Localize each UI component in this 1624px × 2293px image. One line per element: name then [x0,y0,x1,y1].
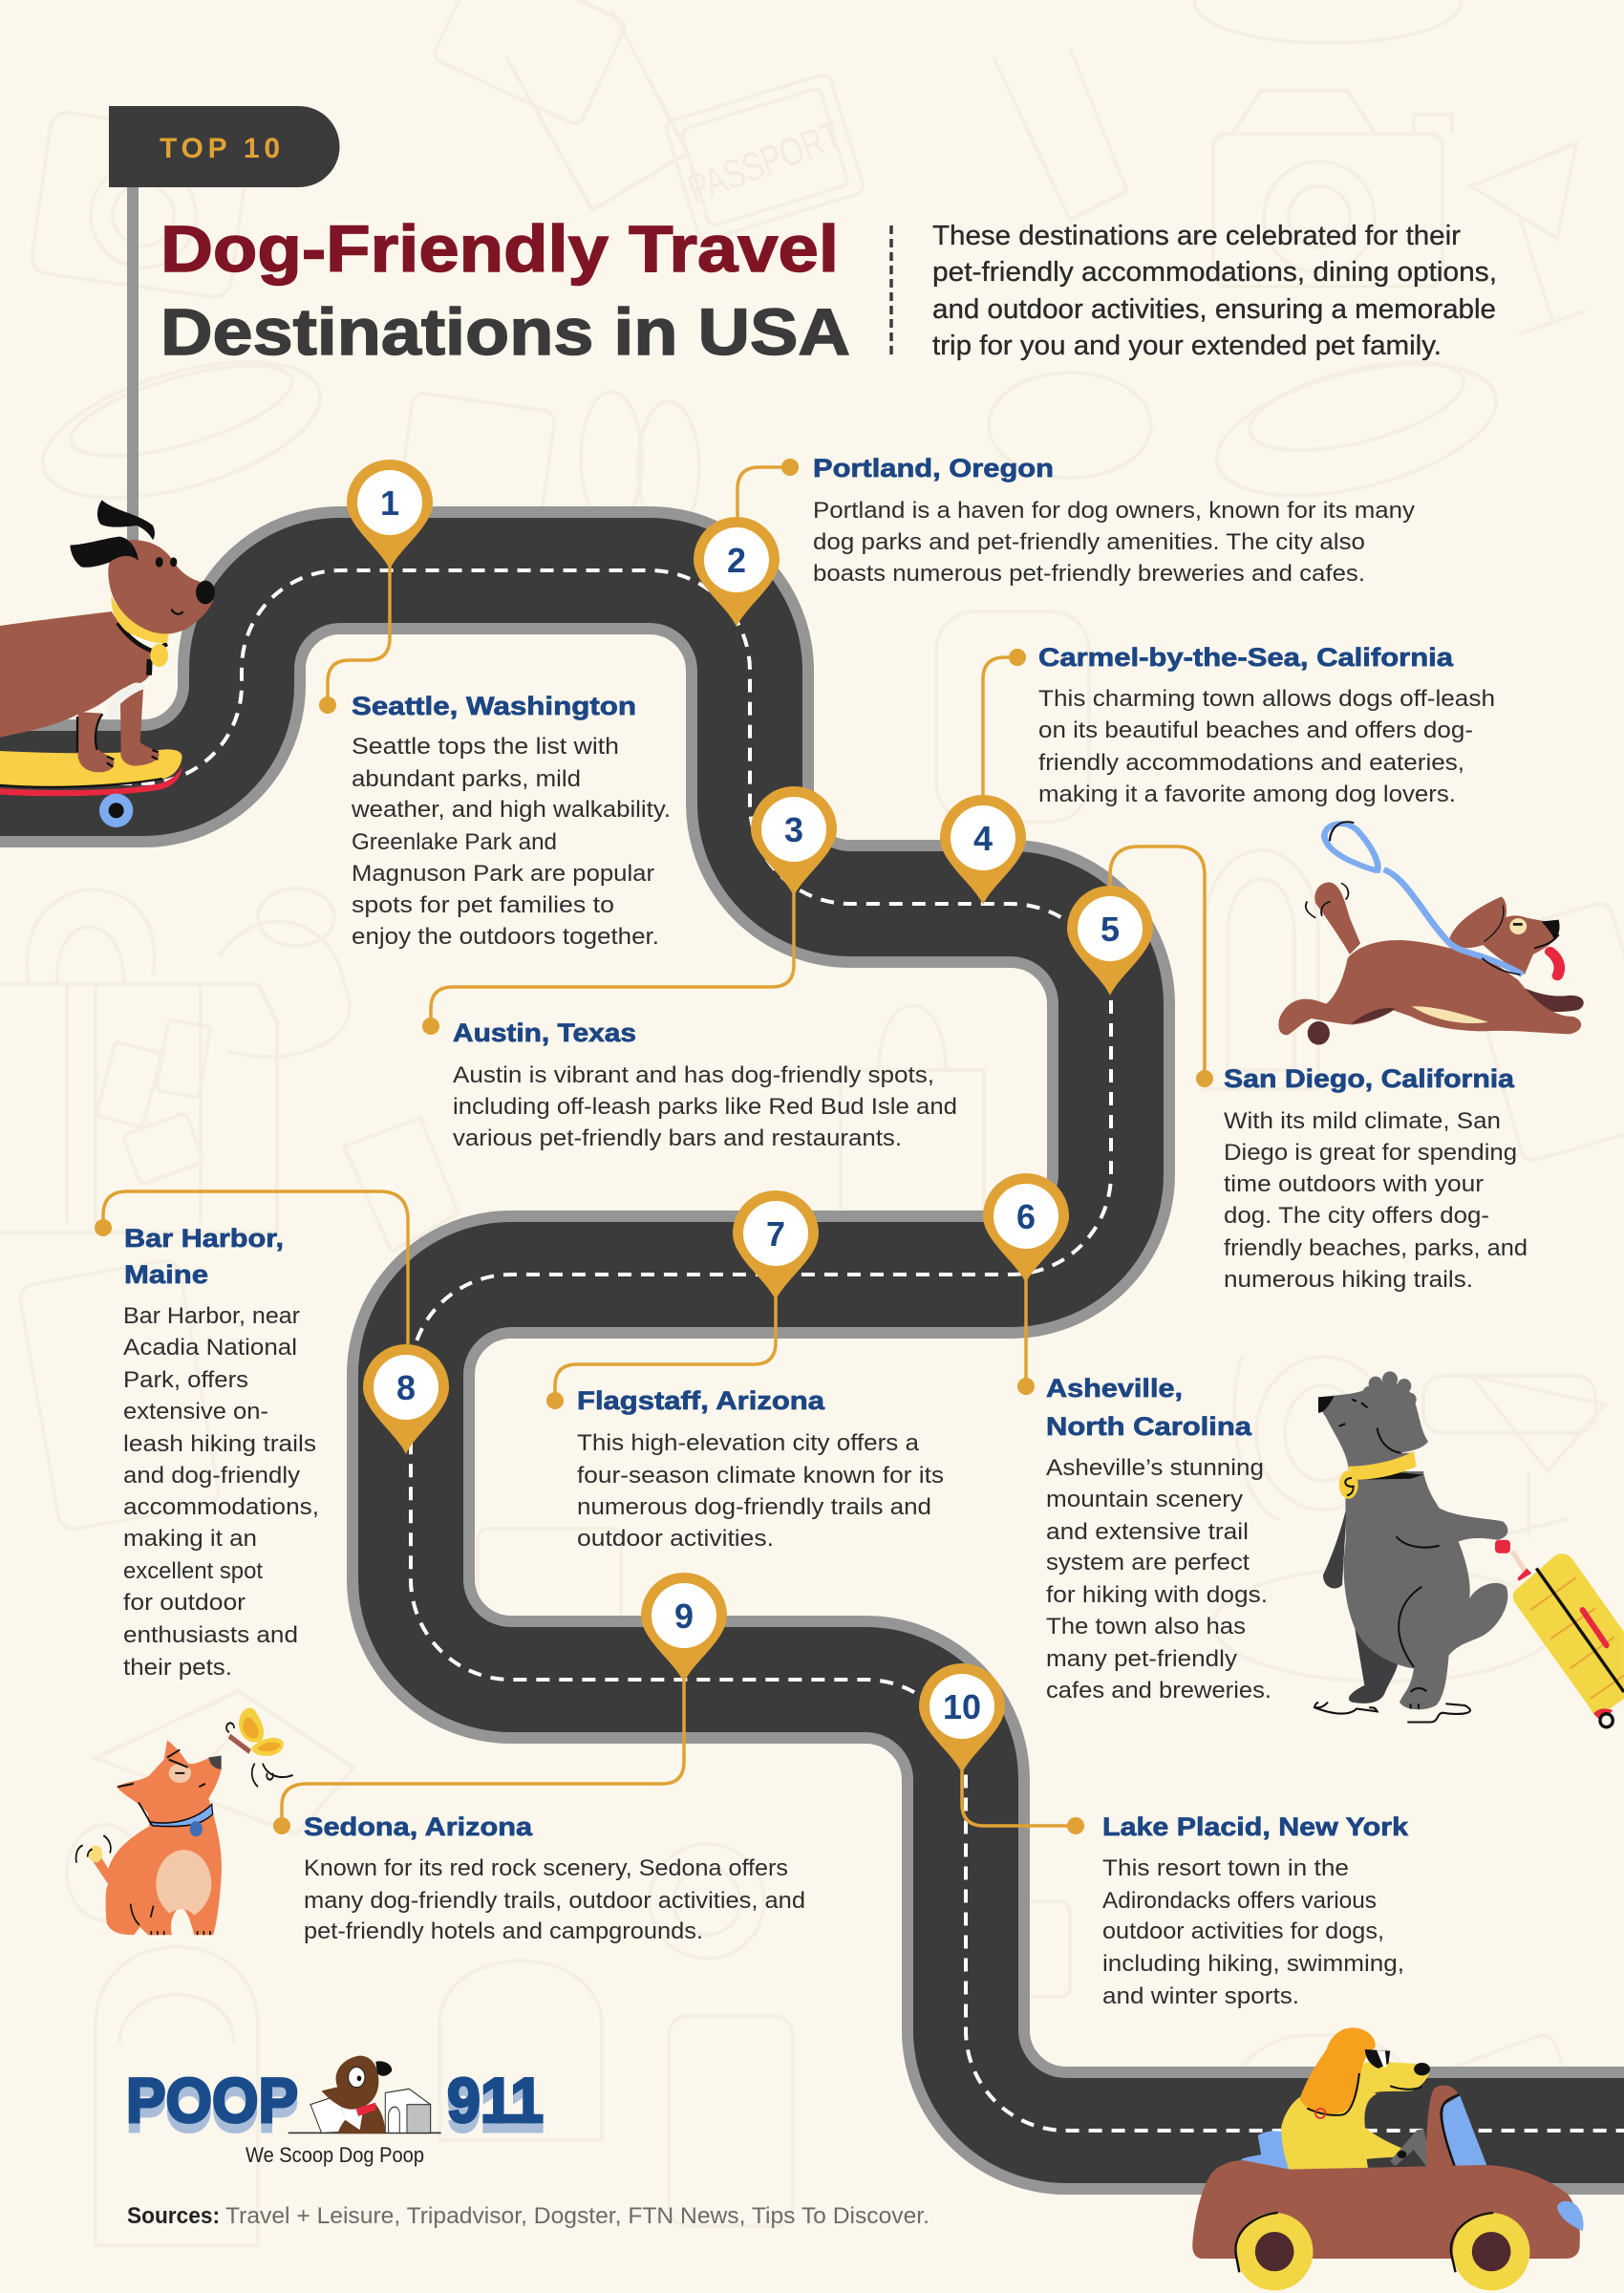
connector lines [95,459,1213,1834]
logo: Poop 911: 911 [447,2074,544,2145]
panel: Asheville, North Carolina: Asheville’s stunning [1046,1455,1264,1481]
panel: Seattle, Washington: Seattle, Washington [352,692,636,720]
sources line: Travel + Leisure, Tripadvisor, Dogster, FTN News, Tips To Discover. [225,2203,930,2229]
panel: Lake Placid, New York [1102,1812,1409,2009]
panel: Sedona, Arizona [304,1812,805,1944]
panel: Carmel-by-the-Sea, California: friendly accommodations and eateries, [1038,750,1464,776]
map pin 4: 4 [973,819,993,858]
panel: Bar Harbor, Maine: Acadia National [123,1335,297,1361]
map pin 10 [919,1663,1005,1773]
panel: Asheville, North Carolina: The town also has [1046,1614,1246,1639]
map pin 10: 10 [943,1687,981,1726]
panel: Bar Harbor, Maine: making it an [123,1526,257,1552]
panel: Sedona, Arizona: Known for its red rock scenery, Sedona offers [304,1855,788,1881]
panel: Seattle, Washington [351,692,671,950]
logo: Poop 911 [126,2056,544,2167]
panel: Bar Harbor, Maine: enthusiasts and [123,1622,298,1648]
panel: Bar Harbor, Maine: their pets. [123,1655,232,1681]
panel: San Diego, California: numerous hiking trails. [1224,1267,1473,1293]
intro text: and outdoor activities, ensuring a memorable [932,294,1496,325]
panel: Seattle, Washington: Greenlake Park and [352,829,557,855]
panel: Bar Harbor, Maine: Bar Harbor, near [123,1303,300,1329]
panel: Sedona, Arizona: pet-friendly hotels and campgrounds. [304,1918,703,1944]
map pin 3: 3 [784,810,803,849]
intro text: pet-friendly accommodations, dining options, [932,257,1497,288]
map pin 4 [940,795,1026,905]
panel: Portland, Oregon: Portland, Oregon [813,454,1054,482]
panel: San Diego, California: friendly beaches, parks, and [1224,1235,1528,1261]
map pin 9: 9 [674,1597,694,1636]
panel: Asheville, North Carolina: cafes and breweries. [1046,1678,1271,1704]
map pin 8: 8 [396,1368,416,1407]
map pin 7: 7 [766,1214,785,1254]
panel: Carmel-by-the-Sea, California [1038,643,1495,807]
panel: Portland, Oregon: Portland is a haven for dog owners, known for its many [813,498,1415,524]
map pin 6 [983,1173,1069,1283]
illustration: running dog with leash [1278,822,1584,1045]
panel: Carmel-by-the-Sea, California: on its beautiful beaches and offers dog- [1038,718,1473,743]
panel: Bar Harbor, Maine [123,1224,319,1681]
panel: Seattle, Washington: enjoy the outdoors together. [352,924,659,950]
panel: Austin, Texas: various pet-friendly bars and restaurants. [453,1125,902,1151]
panel: Bar Harbor, Maine: excellent spot [123,1558,263,1584]
panel: Seattle, Washington: Seattle tops the list with [352,734,619,760]
panel: Portland, Oregon: dog parks and pet-friendly amenities. The city also [813,529,1365,555]
panel: Carmel-by-the-Sea, California: Carmel-by-the-Sea, California [1038,643,1454,672]
panel: Asheville, North Carolina: system are perfect [1046,1550,1250,1575]
panel: Asheville, North Carolina: North Carolina [1046,1412,1252,1441]
panel: Asheville, North Carolina: mountain scenery [1046,1487,1243,1512]
panel: Portland, Oregon [813,454,1415,587]
panel: Bar Harbor, Maine: and dog-friendly [123,1463,300,1489]
panel: Asheville, North Carolina: and extensive trail [1046,1519,1249,1545]
logo: Poop 911: 911 [447,2065,544,2135]
title [160,212,850,369]
map pin 5: 5 [1100,910,1120,949]
map pin 3 [751,786,837,896]
title: Dog-Friendly Travel [160,212,839,286]
illustration: poodle with suitcase [1314,1371,1624,1727]
intro text [932,221,1497,361]
logo: Poop 911: We Scoop Dog Poop [246,2143,424,2167]
panel: Bar Harbor, Maine: for outdoor [123,1590,246,1616]
panel: San Diego, California: dog. The city offers dog- [1224,1203,1489,1229]
map pin 9 [641,1573,727,1682]
panel: Flagstaff, Arizona: Flagstaff, Arizona [577,1386,825,1415]
map pin 7 [733,1190,819,1300]
panel: Lake Placid, New York: This resort town in the [1102,1855,1349,1881]
panel: Seattle, Washington: weather, and high walkability. [351,797,671,823]
panel: Austin, Texas: including off-leash parks like Red Bud Isle and [453,1094,957,1120]
panel: Asheville, North Carolina: for hiking with dogs. [1046,1582,1268,1608]
panel: Lake Placid, New York: outdoor activities for dogs, [1102,1918,1384,1944]
title: Destinations in USA [160,295,850,369]
text: PASSPORT [681,112,847,211]
panel: Austin, Texas [453,1018,957,1151]
panel: Bar Harbor, Maine: leash hiking trails [123,1431,316,1457]
panel: Flagstaff, Arizona: outdoor activities. [577,1526,774,1552]
panel: Carmel-by-the-Sea, California: This charming town allows dogs off-leash [1038,686,1495,712]
panel: Sedona, Arizona: many dog-friendly trails, outdoor activities, and [304,1888,805,1914]
map pin 1 [347,460,433,569]
panel: Lake Placid, New York: Lake Placid, New York [1102,1812,1409,1841]
panel: San Diego, California: With its mild climate, San [1224,1108,1501,1134]
panel: Austin, Texas: Austin is vibrant and has dog-friendly spots, [453,1062,934,1088]
panel: Seattle, Washington: abundant parks, mild [352,766,581,792]
panel: Lake Placid, New York: including hiking, swimming, [1102,1951,1404,1977]
map pin 5 [1067,886,1153,996]
panel: San Diego, California: Diego is great for spending [1224,1140,1517,1166]
panel: Bar Harbor, Maine: accommodations, [123,1494,319,1520]
map pin 2: 2 [727,541,746,580]
panel: San Diego, California: San Diego, California [1224,1064,1515,1093]
map pin 6: 6 [1016,1197,1036,1236]
panel: San Diego, California: time outdoors with your [1224,1171,1484,1197]
logo: Poop 911: POOP [126,2074,298,2145]
logo: Poop 911: POOP [126,2065,298,2135]
panel: Lake Placid, New York: and winter sports. [1102,1983,1299,2009]
panel: Portland, Oregon: boasts numerous pet-friendly breweries and cafes. [813,561,1365,587]
panel: Lake Placid, New York: Adirondacks offers various [1102,1888,1377,1914]
map pin 8 [363,1344,449,1454]
panel: Seattle, Washington: Magnuson Park are popular [352,861,654,887]
panel: Bar Harbor, Maine: Maine [124,1260,208,1289]
intro text: trip for you and your extended pet family. [932,331,1442,361]
panel: Carmel-by-the-Sea, California: making it a favorite among dog lovers. [1038,782,1456,807]
panel: Austin, Texas: Austin, Texas [453,1018,636,1047]
panel: Bar Harbor, Maine: Park, offers [123,1367,248,1393]
illustration: dog driving car [1192,2027,1584,2290]
panel: Flagstaff, Arizona: numerous dog-friendly trails and [577,1494,931,1520]
signpost badge: TOP 10: TOP 10 [160,133,280,164]
panel: Asheville, North Carolina: Asheville, [1046,1374,1183,1403]
panel: Bar Harbor, Maine: Bar Harbor, [124,1224,284,1253]
illustration: dog on skateboard [0,500,215,827]
map pin 2 [694,517,780,627]
map pin 1: 1 [380,483,399,523]
panel: San Diego, California [1224,1064,1528,1293]
road [0,570,1624,2131]
panel: Flagstaff, Arizona: This high-elevation city offers a [577,1430,920,1456]
illustration: corgi and butterfly [76,1708,293,1935]
panel: Sedona, Arizona: Sedona, Arizona [304,1812,533,1841]
panel: Asheville, North Carolina: many pet-friendly [1046,1646,1237,1672]
panel: Flagstaff, Arizona: four-season climate known for its [577,1463,944,1489]
panel: Asheville, North Carolina [1046,1374,1271,1704]
panel: Bar Harbor, Maine: extensive on- [123,1399,268,1425]
sources line: Sources: [127,2203,220,2229]
panel: Seattle, Washington: spots for pet families to [352,892,614,918]
intro text: These destinations are celebrated for their [932,221,1461,251]
signpost badge: TOP 10 [109,106,340,545]
panel: Flagstaff, Arizona [577,1386,944,1552]
